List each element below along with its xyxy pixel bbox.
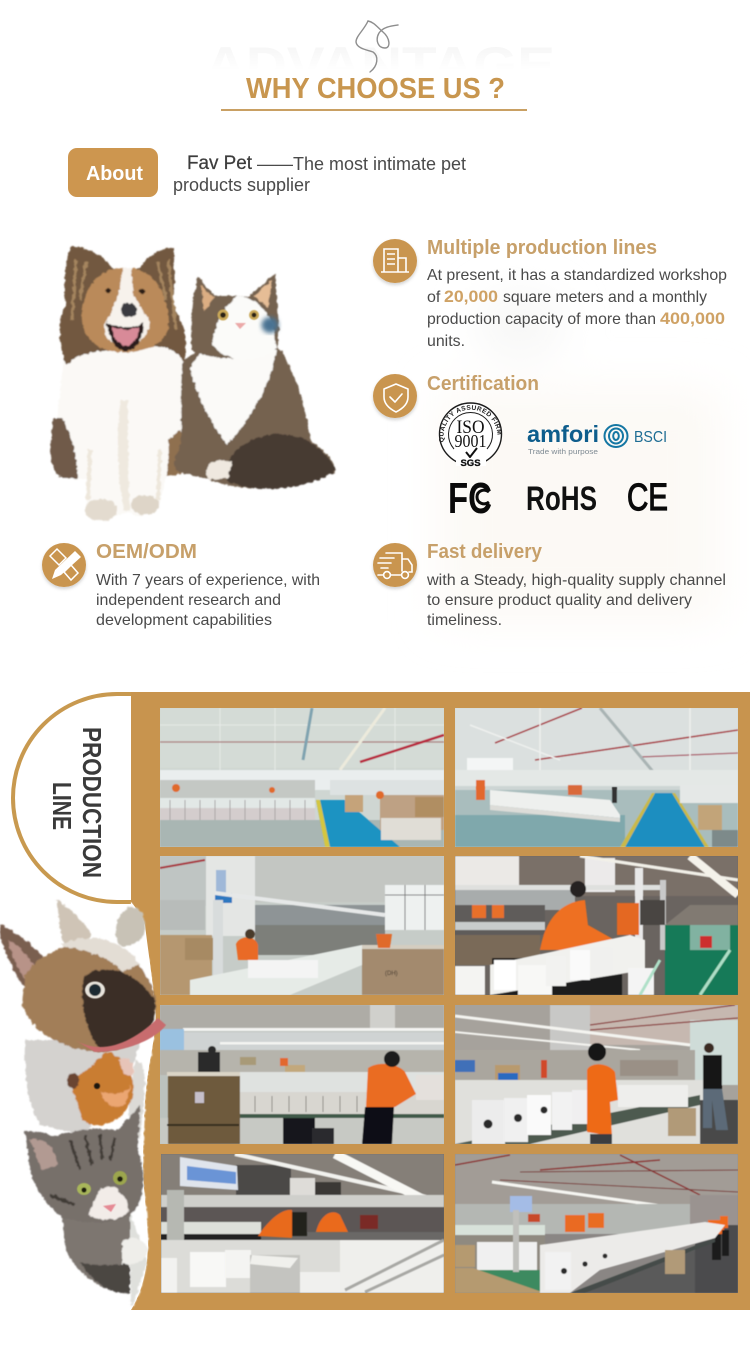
block: fast delivery bbox=[373, 540, 726, 629]
dog body bbox=[56, 320, 188, 521]
logo: amfori BSCI: BSCI bbox=[634, 429, 667, 446]
block: multiple production lines: production capacity of more than bbox=[427, 311, 656, 328]
block: OEM/ODM: OEM/ODM bbox=[96, 540, 197, 563]
block: multiple production lines bbox=[373, 236, 727, 350]
logo: amfori BSCI bbox=[527, 421, 667, 456]
label: production line semicircle: LINE bbox=[47, 782, 77, 830]
paper curl bbox=[131, 902, 155, 1310]
dog face bbox=[82, 268, 169, 352]
icon: shield bbox=[373, 374, 417, 418]
about text: products supplier bbox=[173, 175, 310, 195]
icon: cat line drawing bbox=[356, 21, 398, 72]
dog ears and mane bbox=[60, 247, 186, 365]
block: OEM/ODM bbox=[42, 540, 320, 629]
block: multiple production lines: 400,000 bbox=[660, 310, 725, 328]
bulldog head bbox=[22, 943, 156, 1052]
photo: factory 7 bbox=[161, 1154, 444, 1293]
block: multiple production lines: of bbox=[427, 289, 441, 306]
cat head bbox=[191, 273, 279, 358]
logo: FC: FC bbox=[448, 474, 492, 523]
cat body bbox=[174, 345, 335, 488]
logo: amfori BSCI: amfori bbox=[527, 421, 599, 447]
pet facial details bbox=[75, 982, 166, 1212]
block: fast delivery: Fast delivery bbox=[427, 540, 543, 563]
icon: building bbox=[373, 239, 417, 283]
ghost word ADVANTAGE: ADVANTAGE bbox=[205, 37, 555, 93]
faint product background bbox=[440, 295, 720, 620]
bulldog ears bbox=[57, 900, 92, 960]
dog mouth bbox=[107, 322, 144, 351]
logo: CE: CE bbox=[627, 477, 668, 519]
dog flank shading bbox=[51, 418, 78, 478]
about text: Fav Pet bbox=[187, 153, 253, 174]
block: multiple production lines: 20,000 bbox=[444, 288, 498, 306]
bulldog paw bbox=[116, 907, 145, 946]
block: multiple production lines: square meters and a monthly bbox=[503, 289, 707, 306]
photo: factory 2 bbox=[455, 708, 738, 847]
about text: ——The most intimate pet bbox=[257, 154, 466, 174]
kitten head bbox=[25, 1105, 144, 1223]
cat face details bbox=[218, 310, 278, 333]
title: WHY CHOOSE US ? bbox=[246, 73, 505, 105]
block: OEM/ODM: development capabilities bbox=[96, 612, 272, 629]
kitten paw bbox=[122, 1238, 148, 1264]
label: production line semicircle: PRODUCTION bbox=[77, 727, 107, 878]
logo: ISO 9001 SGS bbox=[438, 402, 502, 469]
logo: amfori BSCI: Trade with purpose bbox=[528, 447, 598, 456]
dog eyes and nose bbox=[105, 288, 111, 294]
photo: factory 8 bbox=[455, 1154, 738, 1293]
photo: factory 5 bbox=[160, 1005, 444, 1144]
logo: ISO 9001 SGS: SGS bbox=[460, 458, 481, 469]
photo: dog and cat bbox=[51, 247, 336, 521]
icon: pencil bbox=[42, 543, 86, 587]
about text bbox=[173, 153, 466, 195]
about button: About bbox=[86, 163, 143, 185]
logo: ISO 9001 SGS: ISO bbox=[456, 417, 484, 438]
block: certification: Certification bbox=[427, 372, 539, 395]
photo: factory 6 bbox=[455, 1005, 738, 1144]
dog paws bbox=[85, 499, 117, 521]
block: certification bbox=[372, 372, 668, 523]
block: fast delivery: to ensure product quality and delivery bbox=[427, 592, 692, 609]
block: multiple production lines: Multiple production lines bbox=[427, 236, 657, 259]
block: multiple production lines: units. bbox=[427, 333, 465, 350]
illustration: pets peeking bbox=[0, 900, 156, 1310]
block: OEM/ODM: With 7 years of experience, with bbox=[96, 572, 320, 589]
hamster bbox=[67, 1052, 133, 1125]
about button bbox=[68, 148, 158, 197]
block: OEM/ODM: independent research and bbox=[96, 592, 281, 609]
photo: factory 3: (DH) bbox=[385, 971, 398, 977]
photo: factory 4 bbox=[455, 856, 738, 995]
kitten body bbox=[62, 1205, 130, 1293]
logo: ISO 9001 SGS: QUALITY ASSURED FIRM bbox=[438, 405, 501, 442]
bulldog neck bbox=[25, 1040, 140, 1135]
label: production line semicircle bbox=[13, 694, 131, 902]
photo: factory 1 bbox=[160, 708, 444, 847]
panel: production line background bbox=[131, 692, 750, 1310]
photo: factory 3 bbox=[160, 856, 444, 995]
logo: ISO 9001 SGS: 9001 bbox=[454, 431, 486, 451]
block: fast delivery: with a Steady, high-quality supply channel bbox=[426, 572, 726, 589]
icon: truck bbox=[373, 543, 417, 587]
logo: RoHS: RoHS bbox=[526, 480, 597, 518]
block: fast delivery: timeliness. bbox=[427, 612, 502, 629]
block: multiple production lines: At present, it has a standardized workshop bbox=[427, 267, 727, 284]
